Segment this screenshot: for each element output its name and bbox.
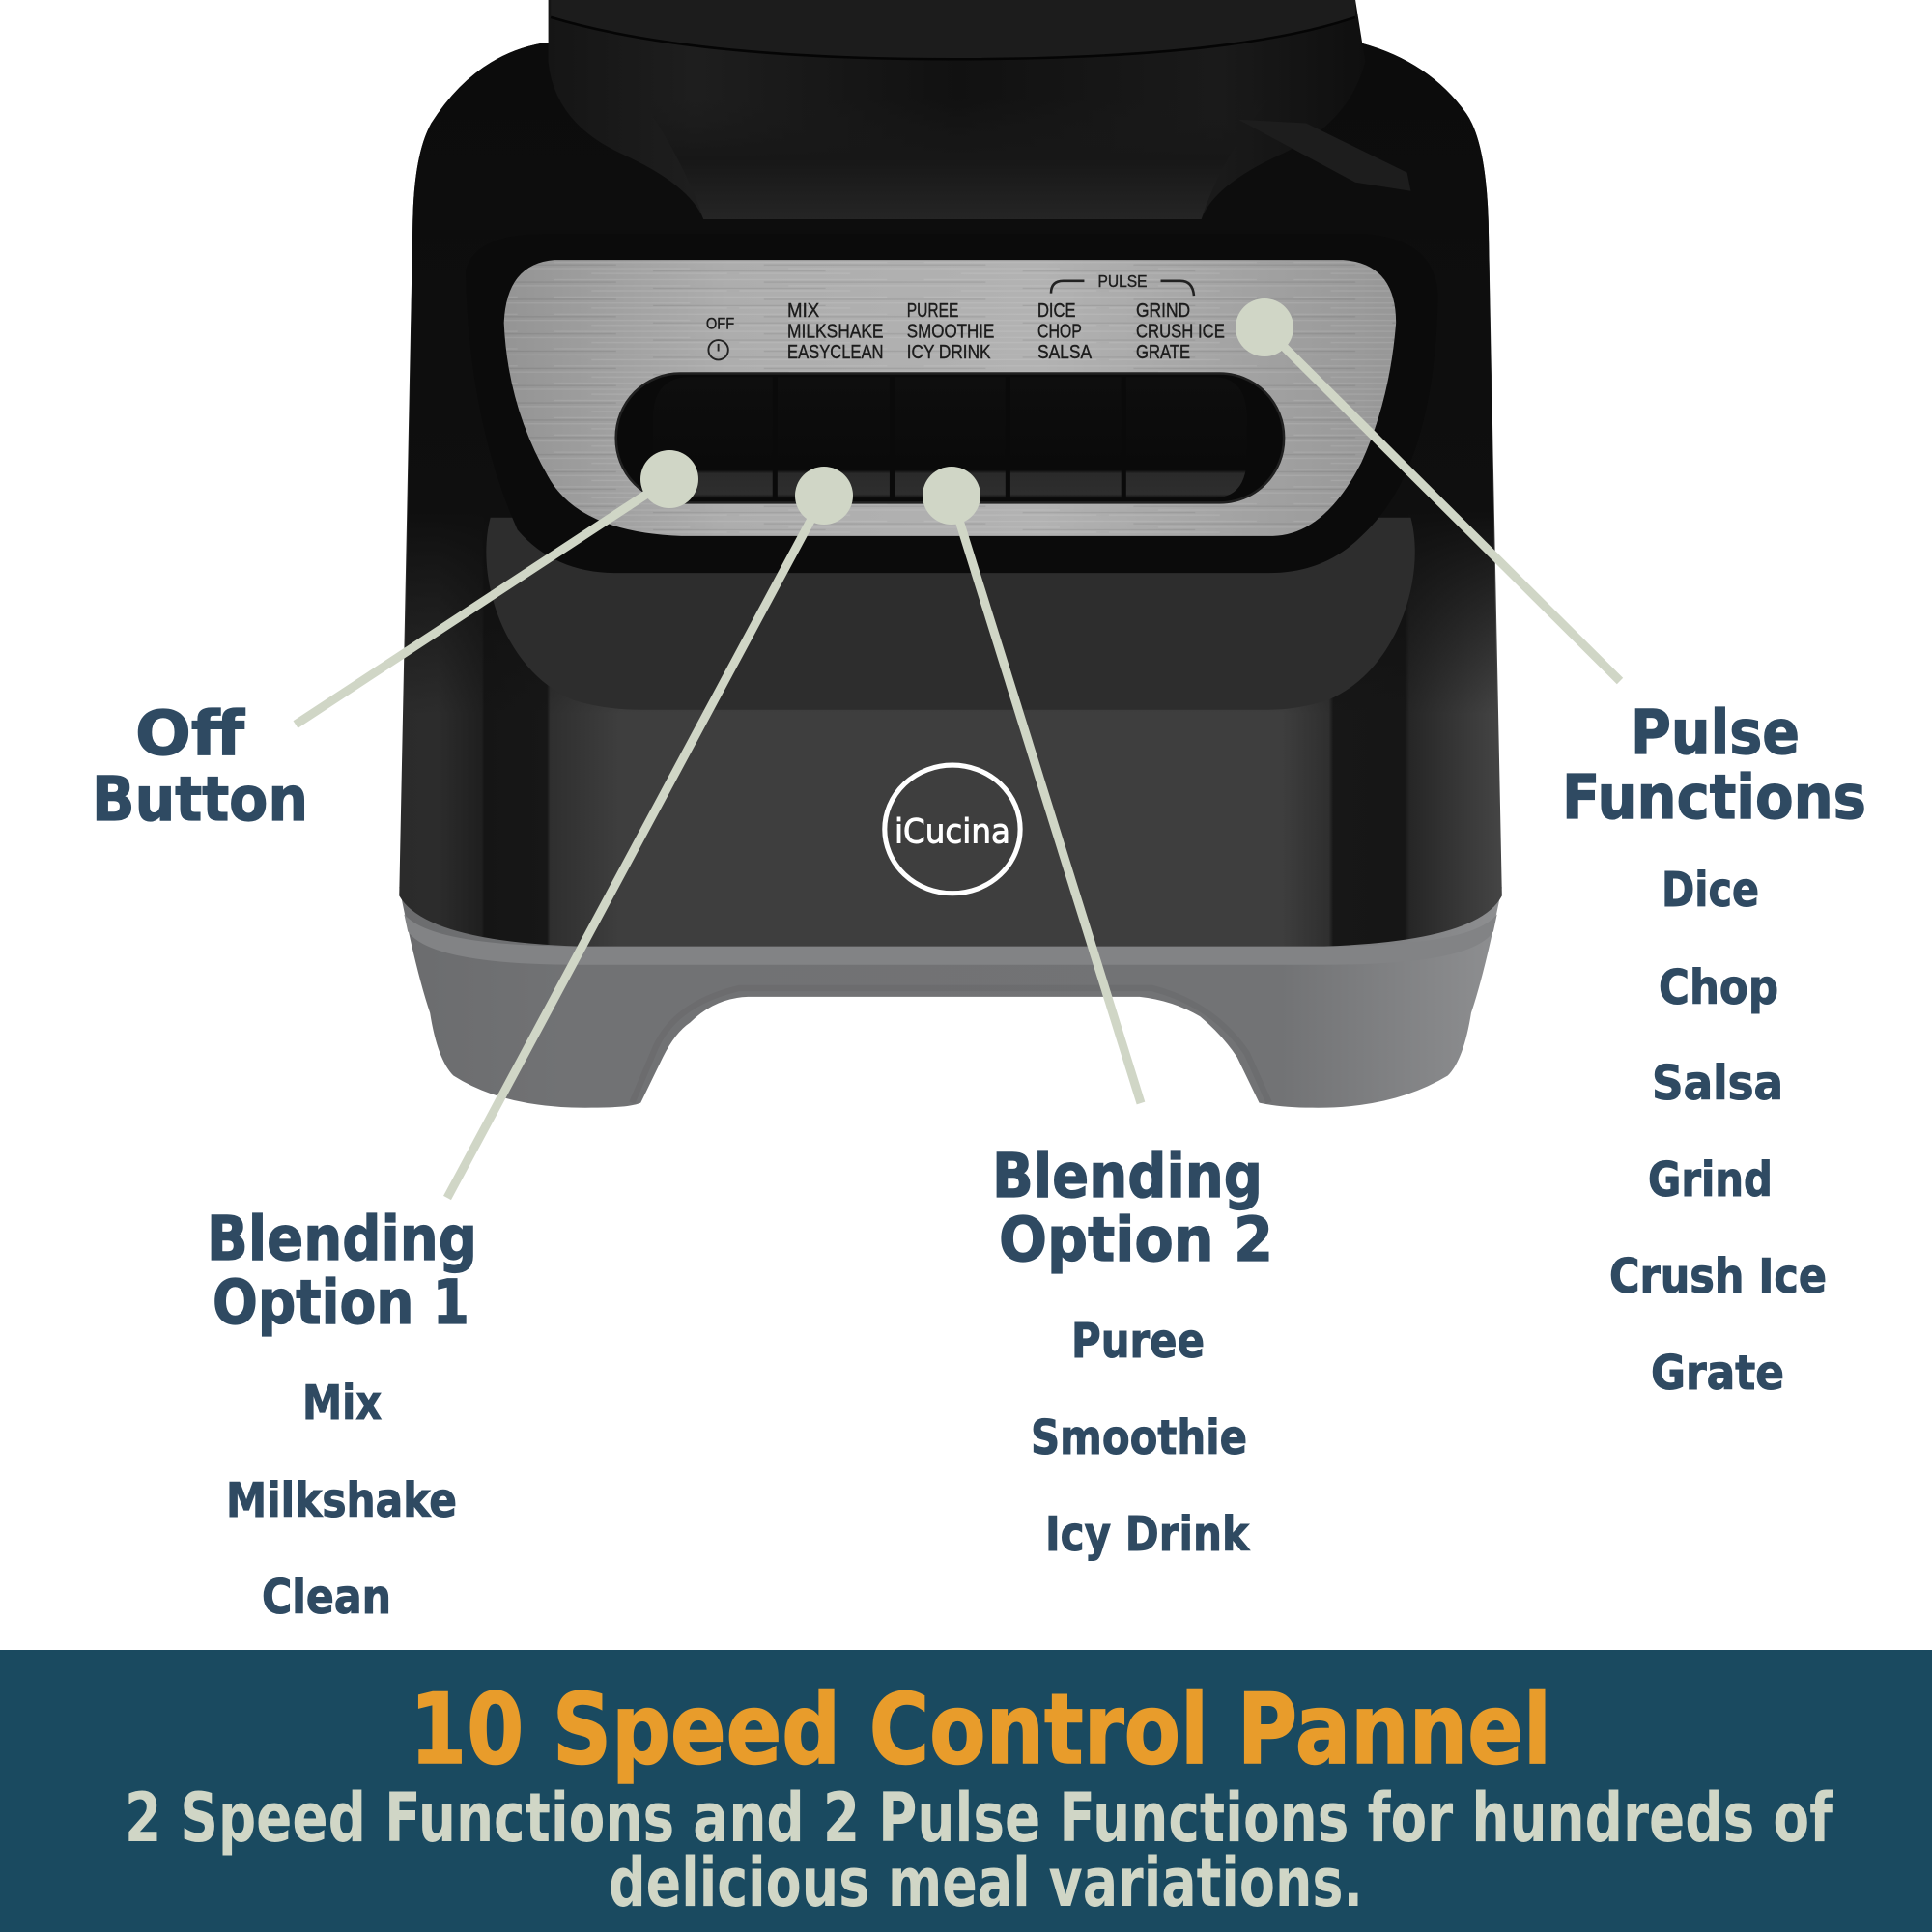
iCucina logo — [885, 765, 1020, 894]
panel labels — [706, 271, 1225, 363]
callout: pulse functions — [1236, 298, 1620, 681]
panel labels: GRIND — [1136, 300, 1190, 322]
callout: blending option 2 — [923, 467, 1141, 1103]
bottom banner — [0, 1650, 1932, 1932]
notch rim shadow — [632, 988, 1269, 1103]
collar seam — [551, 17, 1355, 59]
label: pulse functions: Pulse — [1631, 697, 1800, 768]
panel labels: GRATE — [1136, 342, 1190, 363]
panel labels: CHOP — [1037, 321, 1082, 342]
panel labels: OFF — [706, 315, 734, 333]
panel labels: MILKSHAKE — [787, 321, 884, 342]
panel labels: SALSA — [1037, 342, 1092, 363]
button recess — [616, 373, 1284, 502]
label: pulse functions — [1562, 697, 1866, 833]
panel labels: PUREE — [907, 300, 958, 322]
list: pulse functions: Grate — [1651, 1346, 1784, 1401]
label: blending option 1 — [207, 1204, 477, 1338]
panel labels: DICE — [1037, 300, 1076, 322]
panel bezel — [466, 234, 1438, 573]
panel labels: EASYCLEAN — [787, 342, 884, 363]
list: pulse functions: Salsa — [1652, 1056, 1783, 1111]
iCucina logo: iCucina — [895, 812, 1010, 851]
label: blending option 2: Blending — [992, 1141, 1263, 1211]
panel labels: ICY DRINK — [907, 342, 991, 363]
silver panel — [504, 260, 1396, 536]
list: blending option 2: Puree — [1071, 1314, 1205, 1369]
banner subtitle — [125, 1778, 1833, 1922]
banner subtitle: delicious meal variations. — [609, 1843, 1363, 1922]
dark band around control panel — [486, 518, 1415, 710]
label: off button: Off — [135, 698, 245, 769]
list: pulse functions: Dice — [1662, 863, 1759, 918]
label: blending option 2 — [992, 1141, 1273, 1275]
list: blending option 1 — [226, 1376, 457, 1625]
callout: blending option 1 — [447, 467, 853, 1198]
label: blending option 1: Blending — [207, 1204, 477, 1274]
buttons — [653, 377, 1247, 497]
panel labels: MIX — [787, 300, 820, 322]
banner title: 10 Speed Control Pannel — [410, 1672, 1551, 1786]
blender base photo — [399, 0, 1502, 1108]
label: pulse functions: Functions — [1562, 762, 1866, 833]
neck collar — [551, 0, 1355, 59]
grey foot — [399, 887, 1502, 1108]
callout: off button — [296, 450, 698, 724]
neck lower shade — [640, 99, 1269, 219]
label: blending option 1: Option 1 — [213, 1267, 469, 1338]
list: pulse functions: Chop — [1659, 960, 1778, 1015]
black body — [399, 43, 1502, 947]
panel labels: SMOOTHIE — [907, 321, 994, 342]
upper black housing — [404, 43, 1497, 715]
label: blending option 2: Option 2 — [999, 1205, 1273, 1275]
list: blending option 1: Clean — [262, 1570, 391, 1625]
neck — [549, 0, 1365, 219]
list: pulse functions: Grind — [1648, 1152, 1773, 1208]
label: off button: Button — [92, 764, 308, 835]
list: blending option 2: Icy Drink — [1045, 1507, 1250, 1562]
list: blending option 2: Smoothie — [1031, 1410, 1247, 1465]
label: off button — [92, 698, 308, 835]
side vent — [1238, 120, 1410, 191]
panel labels: CRUSH ICE — [1136, 321, 1225, 342]
panel labels: PULSE — [1097, 271, 1148, 291]
foot top highlight — [404, 914, 1497, 965]
list: blending option 2 — [1031, 1314, 1250, 1562]
list: pulse functions: Crush Ice — [1609, 1249, 1827, 1304]
list: blending option 1: Milkshake — [226, 1473, 457, 1528]
list: pulse functions — [1609, 863, 1827, 1401]
list: blending option 1: Mix — [302, 1376, 382, 1431]
